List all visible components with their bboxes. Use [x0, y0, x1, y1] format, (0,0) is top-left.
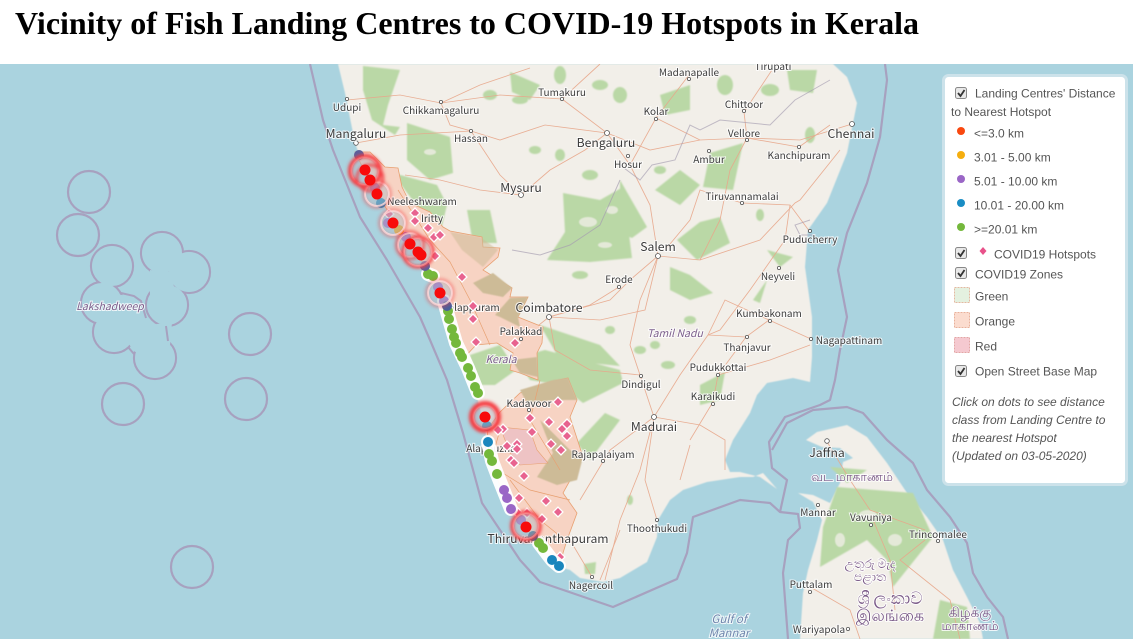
map labels: Nagercoil	[569, 577, 613, 592]
map labels: Neeleshwaram	[387, 193, 457, 208]
map labels: Nagapattinam	[816, 332, 882, 347]
map labels: Madurai	[631, 417, 677, 435]
map labels: Rajapalaiyam	[571, 446, 635, 461]
map labels: Thanjavur	[723, 339, 771, 354]
map labels: Kadavoor	[506, 395, 552, 410]
landing centres: red	[360, 164, 532, 532]
district lines	[398, 190, 570, 540]
land masses	[338, 64, 983, 639]
map labels: Gulf of	[711, 611, 750, 627]
orange zone: north Kerala	[355, 152, 543, 380]
legend: landing centres heading: Landing Centres' Distance	[975, 86, 1116, 100]
roads	[347, 64, 960, 639]
legend background	[944, 76, 1126, 484]
map labels: Hassan	[454, 130, 488, 145]
legend: note: the nearest Hotspot	[952, 431, 1057, 445]
map labels: Kolar	[644, 103, 669, 118]
map labels: Lakshadweep	[76, 299, 145, 314]
map labels: Coimbatore	[516, 298, 583, 316]
landing centre: orange	[394, 225, 404, 235]
legend: landing centres heading	[951, 86, 1116, 119]
map labels: Vellore	[728, 125, 761, 140]
legend: distance classes: 3.01 - 5.00 km	[974, 150, 1051, 164]
forest under zones	[450, 232, 583, 485]
legend: covid hotspots: COVID19 Hotspots	[994, 248, 1096, 262]
map labels: Tiruvannamalai	[705, 188, 779, 203]
landing centres: purple	[354, 150, 538, 541]
landing centres: white underlay	[428, 274, 559, 566]
legend: distance classes: >=20.01 km	[974, 222, 1037, 236]
red zone	[500, 427, 548, 465]
legend: covid zones: Orange	[975, 314, 1015, 328]
map labels: Chikkamagaluru	[403, 102, 479, 117]
map labels: Thiruvananthapuram	[487, 529, 609, 547]
legend: note: class from Landing Centre to	[952, 413, 1106, 427]
map labels: Mannar	[800, 504, 836, 519]
map labels: கிழக்கு	[949, 601, 991, 622]
Lakshadweep boundary circles	[57, 171, 271, 588]
legend: covid zones: Green	[975, 290, 1008, 304]
legend: covid zones: COVID19 Zones	[975, 268, 1063, 282]
map labels: Mangaluru	[326, 124, 386, 142]
map labels: Pudukkottai	[690, 359, 746, 374]
map labels: Malappuram	[440, 299, 500, 314]
forest patches	[363, 66, 970, 639]
legend: covid zones: Red	[975, 340, 997, 354]
orange zone: south Kerala	[487, 378, 583, 567]
map labels: மாகாணம்	[941, 615, 999, 634]
map labels: இலங்கை	[856, 602, 924, 626]
map labels: Hosur	[614, 156, 642, 171]
map labels: Tumakuru	[538, 84, 586, 99]
map labels: Trincomalee	[909, 526, 967, 541]
legend: note	[952, 395, 1106, 463]
map labels: Chittoor	[725, 96, 763, 111]
map labels: Kanchipuram	[768, 147, 830, 162]
map labels: Iritty	[421, 210, 444, 225]
city markers	[345, 77, 940, 631]
title: Vicinity of Fish Landing Centres to COVID-19 Hotspots in Kerala	[15, 5, 919, 41]
map labels: Jaffna	[809, 443, 845, 461]
map labels: ශ්‍රී ලංකාව	[858, 584, 922, 609]
map labels: Erode	[605, 271, 633, 286]
legend: note: (Updated on 03-05-2020)	[952, 449, 1087, 463]
map labels: வட மாகாணம்	[811, 466, 893, 485]
land speckles inside forest	[424, 149, 902, 547]
covid hotspots	[385, 209, 571, 561]
state boundaries	[512, 80, 830, 255]
map labels: Bengaluru	[577, 133, 635, 151]
map labels: Neyveli	[761, 268, 795, 283]
map labels: Karaikudi	[691, 388, 735, 403]
legend panel	[944, 76, 1126, 484]
map labels: Mysuru	[500, 178, 542, 196]
maritime boundaries	[310, 64, 1008, 639]
map labels: පළාත	[854, 566, 887, 585]
map labels: Ambur	[693, 151, 725, 166]
map labels: Puducherry	[783, 231, 838, 246]
legend: note: Click on dots to see distance	[952, 395, 1105, 409]
map labels: උතුරු මැද	[845, 553, 896, 572]
landing centres: blue	[376, 198, 564, 571]
map labels: Tamil Nadu	[647, 326, 703, 341]
map labels: Dindigul	[621, 376, 661, 391]
map labels: Alappuzha	[466, 440, 516, 455]
map labels: Wariyapola	[793, 621, 845, 636]
map labels: Vavuniya	[850, 509, 892, 524]
covid zones	[355, 152, 583, 567]
map labels: Kerala	[485, 352, 518, 367]
map labels	[76, 58, 999, 639]
map labels: Puttalam	[790, 576, 832, 591]
pulsing halos	[350, 156, 540, 540]
header band	[0, 0, 1133, 64]
map labels: Kumbakonam	[736, 305, 802, 320]
map labels: Udupi	[333, 99, 361, 114]
legend: distance classes: <=3.0 km	[974, 126, 1024, 140]
map labels: Salem	[640, 237, 676, 255]
legend: distance classes: 10.01 - 20.00 km	[974, 198, 1064, 212]
map labels: Tirupati	[755, 58, 791, 73]
landing centres: green	[423, 269, 548, 553]
map labels: Madanapalle	[659, 64, 720, 79]
legend: base map: Open Street Base Map	[975, 364, 1097, 378]
legend: distance classes	[957, 126, 1064, 236]
legend: distance classes: 5.01 - 10.00 km	[974, 174, 1057, 188]
legend: landing centres heading: to Nearest Hotspot	[951, 105, 1052, 119]
map labels: Palakkad	[500, 323, 542, 338]
map labels: Chennai	[827, 124, 875, 142]
map labels: Thoothukudi	[627, 520, 687, 535]
legend: covid zones	[954, 268, 1063, 354]
